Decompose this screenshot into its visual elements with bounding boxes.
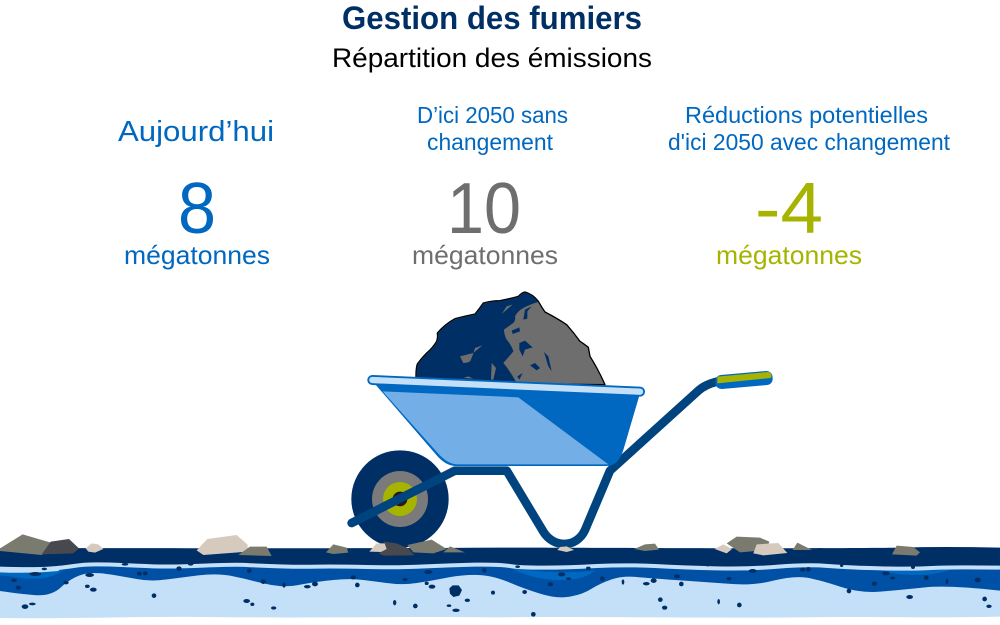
subtitle: Répartition des émissions <box>332 43 652 73</box>
stones <box>0 534 920 556</box>
manure pile <box>416 292 605 385</box>
wheelbarrow <box>351 371 773 548</box>
title: Gestion des fumiers <box>342 0 642 36</box>
soil: dark blue top band <box>0 547 1000 567</box>
column: 2050 without change: mégatonnes <box>412 240 558 270</box>
column: 2050 without change: changement <box>427 129 554 155</box>
soil: mid blue band <box>0 562 1000 597</box>
barrow tray <box>372 380 640 466</box>
column: 2050 without change <box>412 102 568 270</box>
column: 2050 potential reductions: Réductions potentielles <box>685 102 928 128</box>
column: 2050 without change: 10 <box>447 169 521 249</box>
column: today <box>118 116 274 270</box>
column: 2050 potential reductions: d'ici 2050 avec changement <box>668 129 951 155</box>
soil: light blue base <box>0 558 1000 618</box>
column: today: 8 <box>178 169 216 249</box>
soil particles <box>11 563 992 617</box>
column: today: mégatonnes <box>124 240 270 270</box>
column: 2050 potential reductions <box>668 102 951 270</box>
column: 2050 potential reductions: mégatonnes <box>716 240 862 270</box>
column: 2050 potential reductions: -4 <box>755 169 823 249</box>
column: 2050 without change: D’ici 2050 sans <box>417 102 568 128</box>
ground layers <box>0 547 1000 618</box>
soil: bright blue streaks <box>0 568 955 580</box>
soil: pale stripe <box>0 562 1000 573</box>
wheel <box>351 450 449 548</box>
column: today: Aujourd’hui <box>118 116 274 148</box>
handle grip <box>715 371 773 389</box>
frame <box>352 382 717 544</box>
